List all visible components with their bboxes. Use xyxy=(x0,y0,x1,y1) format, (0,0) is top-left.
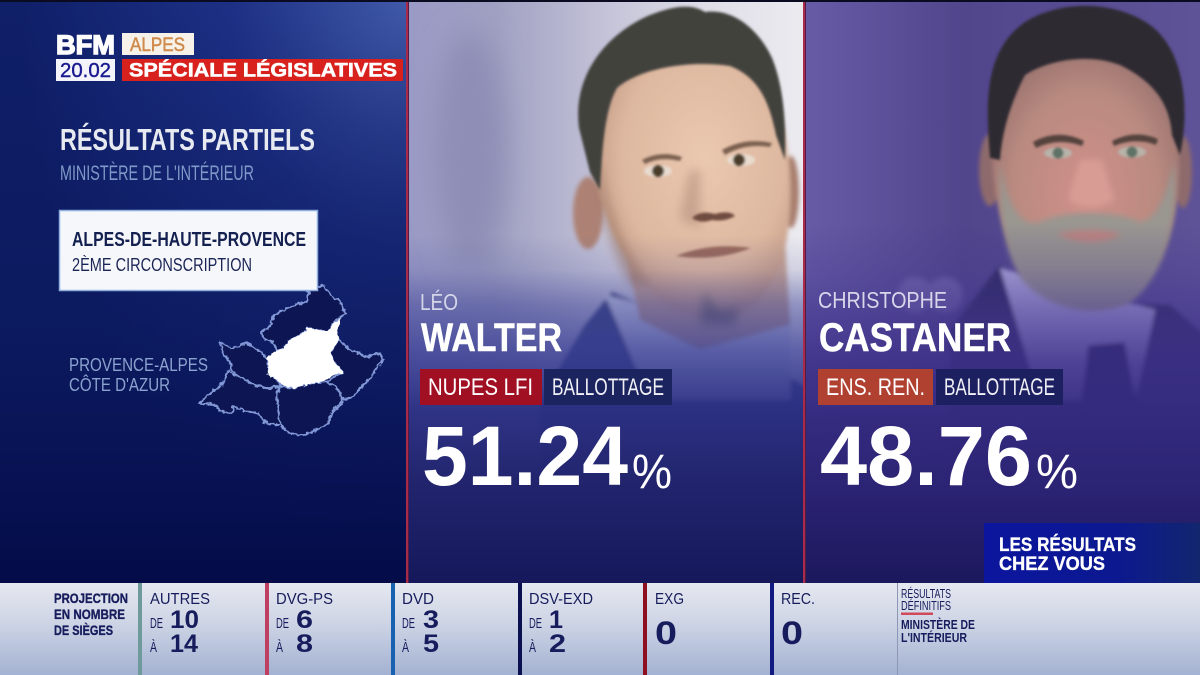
column: AUTRES 10 to 14: DE xyxy=(150,615,163,632)
tag: status ballottage: BALLOTTAGE xyxy=(944,374,1055,401)
map label: region name: PROVENCE-ALPES xyxy=(69,355,208,375)
panel: candidate Léo Walter xyxy=(409,2,830,600)
column: DSV-EXD 1 to 2: DSV-EXD xyxy=(529,591,593,608)
column: DVG-PS 6 to 8: 8 xyxy=(296,630,313,658)
column: AUTRES 10 to 14: AUTRES xyxy=(150,591,210,608)
card: constituency: ALPES-DE-HAUTE-PROVENCE xyxy=(72,229,306,251)
subheading: ministère de l'intérieur: MINISTÈRE DE L'INTÉRIEUR xyxy=(60,162,254,185)
tag: party NUPES LFI xyxy=(420,369,542,405)
ticker label: projection en nombre de sièges: DE SIÈGES xyxy=(54,622,113,638)
column: REC. 0: 0 xyxy=(781,615,803,651)
source note: résultats définitifs: MINISTÈRE DE xyxy=(901,617,975,632)
candidate name: Castaner xyxy=(819,292,1011,352)
source note: résultats définitifs: RÉSULTATS xyxy=(901,586,951,601)
column: DVD 3 to 5: À xyxy=(402,639,409,656)
panel: left title column xyxy=(0,2,408,584)
card: constituency: 2ÈME CIRCONSCRIPTION xyxy=(72,255,252,275)
tag: party NUPES LFI: NUPES LFI xyxy=(428,374,533,401)
portrait: Walter xyxy=(558,4,803,408)
column: EXG 0: EXG xyxy=(655,591,684,608)
ticker label: projection en nombre de sièges: EN NOMBRE xyxy=(54,606,125,622)
column: DVG-PS 6 to 8: 6 xyxy=(296,606,313,634)
column: DVG-PS 6 to 8 xyxy=(265,583,333,675)
tag: ALPES: ALPES xyxy=(130,35,185,56)
column: DSV-EXD 1 to 2: DE xyxy=(529,615,542,632)
column: DVD 3 to 5 xyxy=(391,583,439,675)
score: 48.76% xyxy=(821,426,1076,488)
score: 48.76%: % xyxy=(1036,446,1078,499)
column: DSV-EXD 1 to 2 xyxy=(518,583,593,675)
map label: region name: CÔTE D'AZUR xyxy=(69,374,170,395)
column: AUTRES 10 to 14: 14 xyxy=(170,630,198,658)
column: DVG-PS 6 to 8: DVG-PS xyxy=(276,591,333,608)
column: DVD 3 to 5: 5 xyxy=(423,630,439,658)
banner: spéciale législatives: SPÉCIALE LÉGISLATIVES xyxy=(129,60,397,82)
clock 20.02: 20.02 xyxy=(60,60,111,82)
card: constituency xyxy=(60,210,318,290)
tag: status ballottage: BALLOTTAGE xyxy=(552,374,664,401)
candidate name: Walter xyxy=(420,290,562,352)
column: DSV-EXD 1 to 2: 1 xyxy=(549,606,563,634)
map label: region name xyxy=(69,355,208,395)
source note: résultats définitifs: DÉFINITIFS xyxy=(901,598,951,613)
ticker: seat projection xyxy=(0,583,1200,675)
column: EXG 0: 0 xyxy=(655,615,677,651)
candidate name: Castaner: CASTANER xyxy=(819,316,1011,360)
column: AUTRES 10 to 14 xyxy=(138,583,210,675)
candidate name: Walter: LÉO xyxy=(420,289,458,315)
callout: les résultats chez vous: LES RÉSULTATS xyxy=(999,534,1136,556)
map: provence-alpes-côte d'azur xyxy=(200,285,383,435)
portrait: Castaner xyxy=(950,4,1200,394)
ticker label: projection en nombre de sièges: PROJECTION xyxy=(54,590,128,606)
callout: les résultats chez vous xyxy=(984,523,1200,583)
score: 51.24%: 51.24 xyxy=(422,409,628,503)
heading: résultats partiels: RÉSULTATS PARTIELS xyxy=(60,122,315,157)
candidate name: Walter: WALTER xyxy=(421,316,562,360)
column: DVG-PS 6 to 8: DE xyxy=(276,615,289,632)
score: 48.76%: 48.76 xyxy=(820,409,1032,503)
column: AUTRES 10 to 14: À xyxy=(150,639,157,656)
callout: les résultats chez vous: CHEZ VOUS xyxy=(999,554,1105,575)
score: 51.24%: % xyxy=(632,446,672,499)
column: AUTRES 10 to 14: 10 xyxy=(170,606,199,634)
tag: status ballottage xyxy=(936,369,1063,405)
logo: BFM: BFM xyxy=(56,30,115,60)
tag: status ballottage xyxy=(544,369,672,405)
score: 51.24% xyxy=(424,426,670,488)
column: DSV-EXD 1 to 2: 2 xyxy=(549,630,566,658)
column: DVD 3 to 5: DVD xyxy=(402,591,434,608)
candidate name: Castaner: CHRISTOPHE xyxy=(818,287,947,313)
column: DSV-EXD 1 to 2: À xyxy=(529,639,536,656)
panel: candidate Christophe Castaner xyxy=(806,2,1200,600)
column: DVD 3 to 5: DE xyxy=(402,615,415,632)
tag: party ENS. REN. xyxy=(818,369,933,405)
column: EXG 0 xyxy=(643,583,684,675)
top black stripe xyxy=(0,0,1200,2)
column: DVD 3 to 5: 3 xyxy=(423,606,439,634)
column: DVG-PS 6 to 8: À xyxy=(276,639,283,656)
column: REC. 0 xyxy=(770,583,815,675)
column: REC. 0: REC. xyxy=(781,591,815,608)
ticker label: projection en nombre de sièges xyxy=(54,590,128,638)
tag: party ENS. REN.: ENS. REN. xyxy=(826,374,925,401)
source note: résultats définitifs: L'INTÉRIEUR xyxy=(901,630,967,645)
source note: résultats définitifs xyxy=(897,583,975,675)
